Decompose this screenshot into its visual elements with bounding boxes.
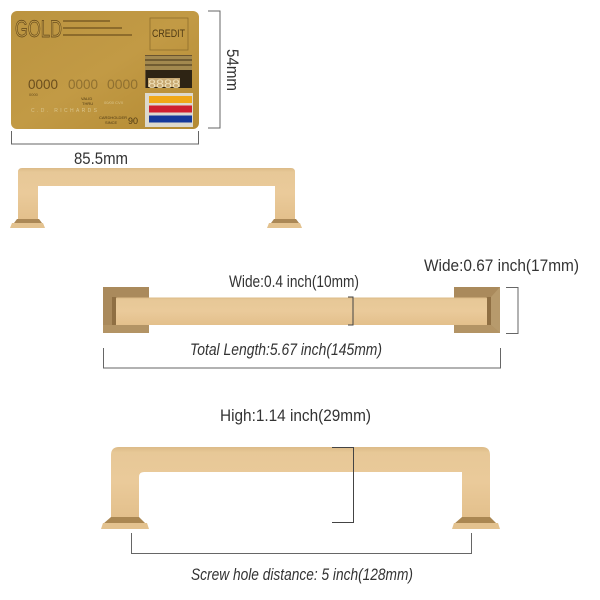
card number [28,76,138,92]
dimension: card height 54mm: 54mm [223,49,242,91]
card small print: 0000 [29,92,39,97]
dimension: total length bracket [104,348,500,368]
right mounting post [454,287,500,333]
card number: 0000 [68,76,98,92]
card small print: 00/00 CVX [104,100,124,105]
card small print [29,92,138,126]
dimension: card height 54mm [208,11,242,128]
card small print: THRU [82,101,93,106]
label: post width: Wide:0.67 inch(17mm) [424,256,579,275]
dimension: card width 85.5mm: 85.5mm [74,149,128,168]
dimension: card width 85.5mm [12,131,198,168]
handle: front view [101,447,500,529]
card logo: GOLD: GOLD [15,16,62,43]
handle: top view [103,287,500,333]
label: height: High:1.14 inch(29mm) [220,406,371,425]
card number: 0000 [28,76,58,92]
card small print: VALID [81,96,92,101]
panel: gold credit card [11,11,199,129]
card label: CREDIT: CREDIT [152,28,185,40]
dimension: height bracket [332,448,354,522]
card small print: C.D. RICHARDS [31,108,98,114]
card colour stripes [145,93,193,127]
card small print: SINCE [105,120,118,125]
card number: 0000 [107,76,138,92]
label: screw hole distance: Screw hole distance: 5 inch(128mm) [191,565,413,584]
label: bar width: Wide:0.4 inch(10mm) [229,272,359,291]
card hologram: 8888 [148,77,180,91]
dimension: post width bracket [506,288,518,334]
label: total length: Total Length:5.67 inch(145mm) [190,340,382,359]
card small print: CARDHOLDER [99,115,127,120]
card label: CREDIT [150,18,188,50]
handle: side view beside card [10,168,302,228]
dimension: bar width bracket [348,297,353,325]
left mounting post [103,287,149,333]
bar [116,298,487,325]
card hologram [145,55,192,91]
card small print: 90 [128,116,138,126]
card logo lines [63,21,132,35]
dimension: screw hole bracket [132,533,472,554]
